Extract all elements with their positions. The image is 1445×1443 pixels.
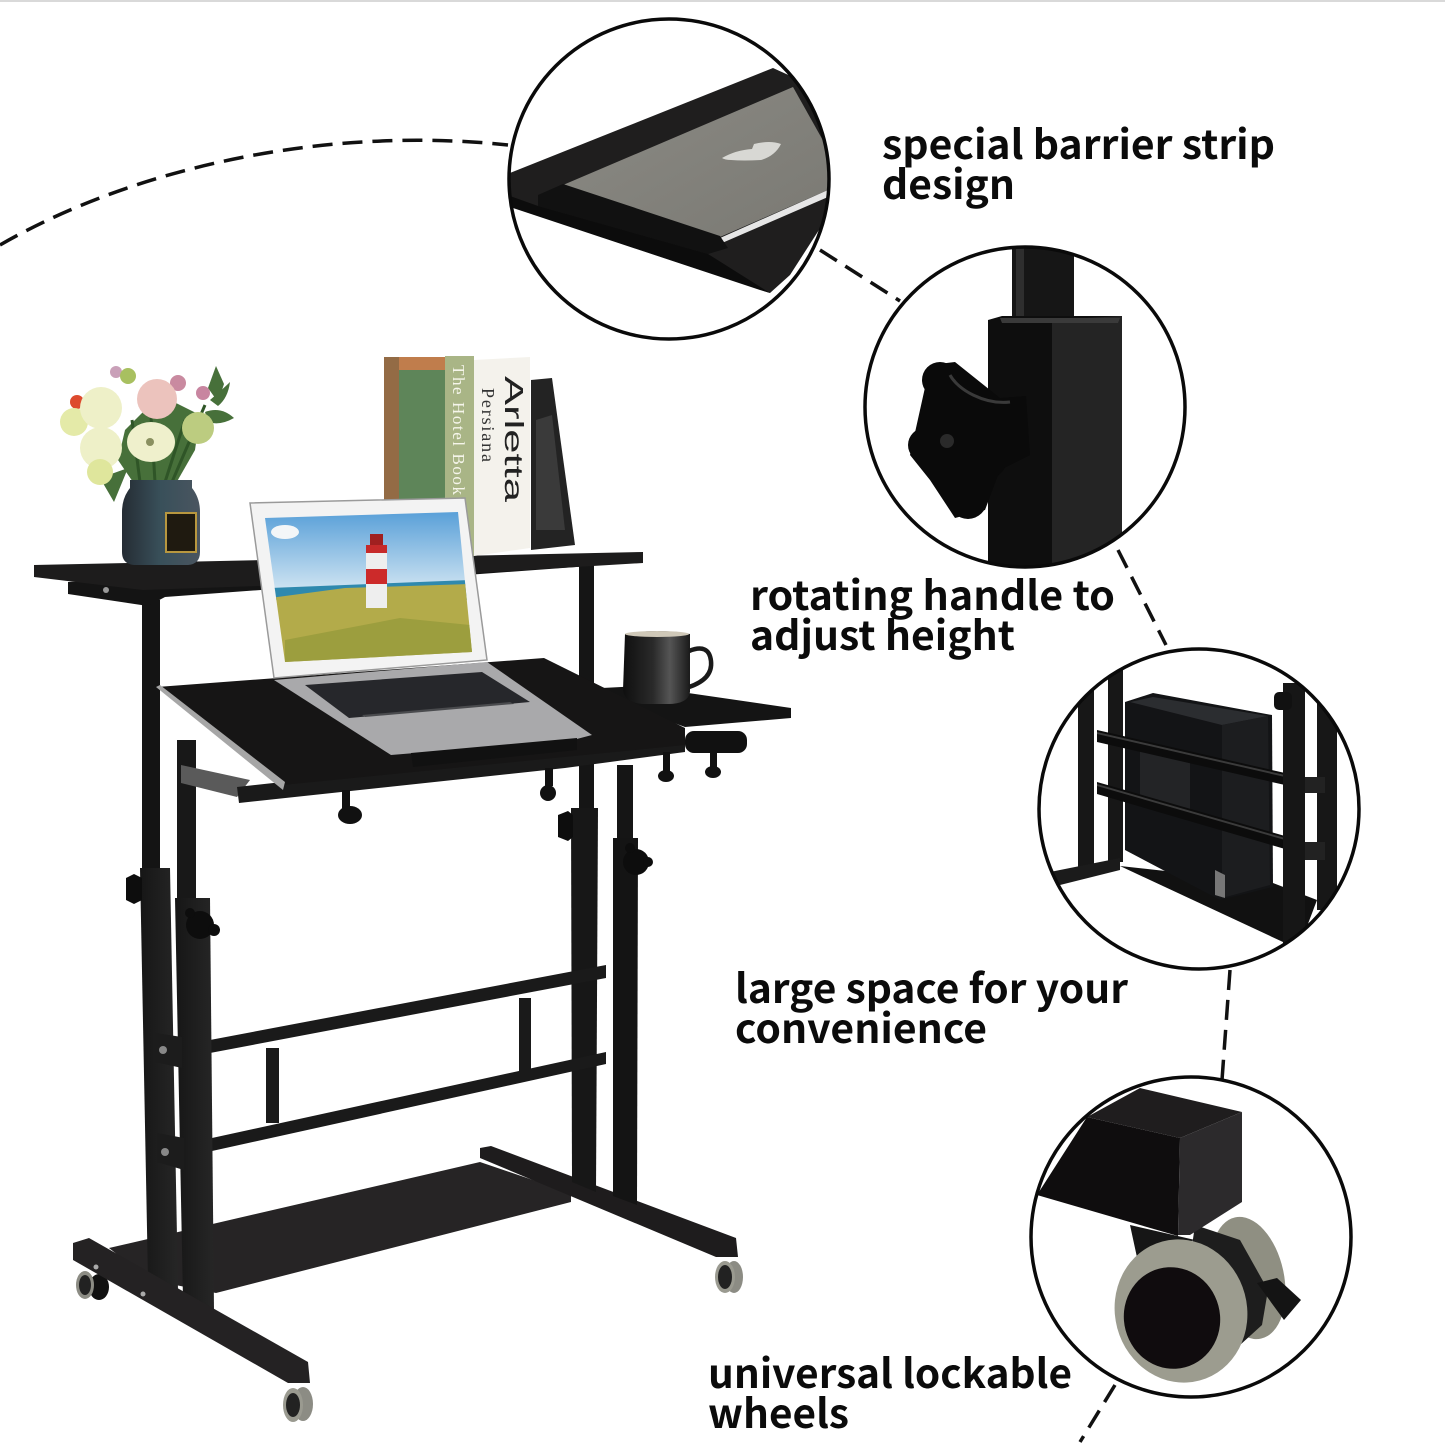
right front column [613,765,638,1205]
books [384,356,575,556]
left front column [155,740,214,1310]
dashed connector: top arc to first detail circle [0,140,508,245]
dashed connector: third to fourth circle [1222,970,1230,1080]
label: rotating handle to adjust height: adjust height [750,604,1015,662]
right foot [480,1146,738,1257]
white book [474,357,530,556]
label: special barrier strip design [882,113,1275,211]
under rail [237,738,685,803]
cross bars [210,965,606,1151]
grey front edge [156,685,285,790]
dashed connector: second to third circle [1118,550,1166,645]
mug [623,631,711,704]
right rear column [571,565,598,1192]
knobs and clamp [338,731,747,824]
desk frame and base [73,565,743,1422]
label: rotating handle to adjust height: rotating handle to [750,564,1115,622]
label: universal lockable wheels [708,1342,1072,1440]
detail circle: lockable wheel [1031,1077,1351,1398]
lower storage shelf [109,1162,571,1293]
top shelf [34,552,643,606]
roller bar [181,765,250,797]
label: special barrier strip design: special barrier strip [882,113,1275,171]
left rear column [140,600,178,1290]
black book [531,378,575,550]
green book [384,356,474,556]
laptop [250,498,592,767]
wheels [76,1261,743,1422]
label: universal lockable wheels: wheels [708,1382,849,1440]
knobs [126,811,653,939]
tilting desktop and side tray [156,658,791,824]
label: large space for your convenience: large space for your [735,957,1129,1015]
detail circle: large storage space [1039,649,1359,969]
dashed connector: first to second circle [820,250,900,301]
flower vase [60,366,234,565]
label: large space for your convenience [735,957,1129,1055]
label: special barrier strip design: design [882,153,1015,211]
white book: Persiana [478,388,498,462]
label: large space for your convenience: convenience [735,997,987,1055]
left foot [73,1238,310,1383]
laptop base [274,662,592,755]
detail circle: barrier strip [505,19,835,339]
dashed connector: fourth circle downward [1080,1385,1115,1442]
label: universal lockable wheels: universal lockable [708,1342,1072,1400]
white book: Arletta [499,376,529,503]
green book: The Hotel Book [449,365,468,496]
detail circle: rotating handle [865,245,1185,570]
desktop [157,658,685,785]
side tray [602,686,791,727]
label: rotating handle to adjust height [750,564,1115,662]
